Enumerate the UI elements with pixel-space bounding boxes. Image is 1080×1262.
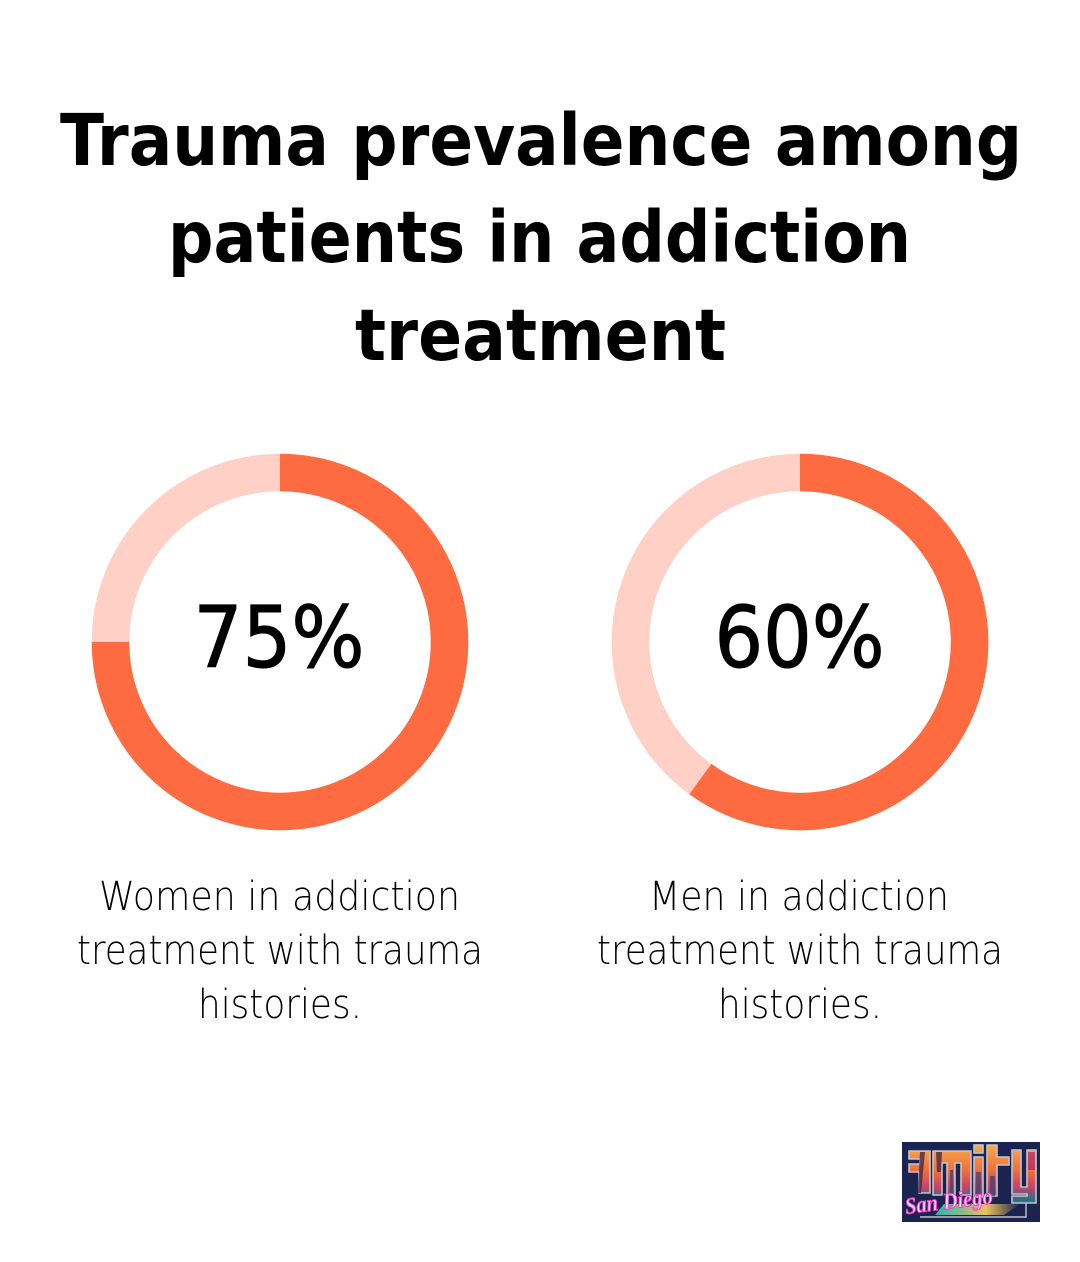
title: patients in addiction xyxy=(168,196,911,279)
text block: men caption: histories. xyxy=(718,982,882,1028)
panel: men donut chart: 60% xyxy=(714,589,884,688)
text block: men caption xyxy=(597,874,1003,1028)
text block: men caption: treatment with trauma xyxy=(597,928,1003,974)
title: treatment xyxy=(355,294,726,377)
text block: women caption xyxy=(77,874,483,1028)
icon: Amity San Diego logo xyxy=(902,1142,1040,1222)
logo detail: palms and towers xyxy=(918,1152,1035,1196)
text block: women caption: histories. xyxy=(198,982,362,1028)
panel: women donut chart xyxy=(110,472,450,812)
text block: men caption: Men in addiction xyxy=(649,874,949,920)
logo script: San Diego: San Diego xyxy=(904,1183,994,1219)
panel: women donut chart: 75% xyxy=(194,589,364,688)
title xyxy=(60,99,1022,377)
text block: women caption: treatment with trauma xyxy=(77,928,483,974)
text block: women caption: Women in addiction xyxy=(99,874,460,920)
panel: men donut chart xyxy=(630,472,970,812)
